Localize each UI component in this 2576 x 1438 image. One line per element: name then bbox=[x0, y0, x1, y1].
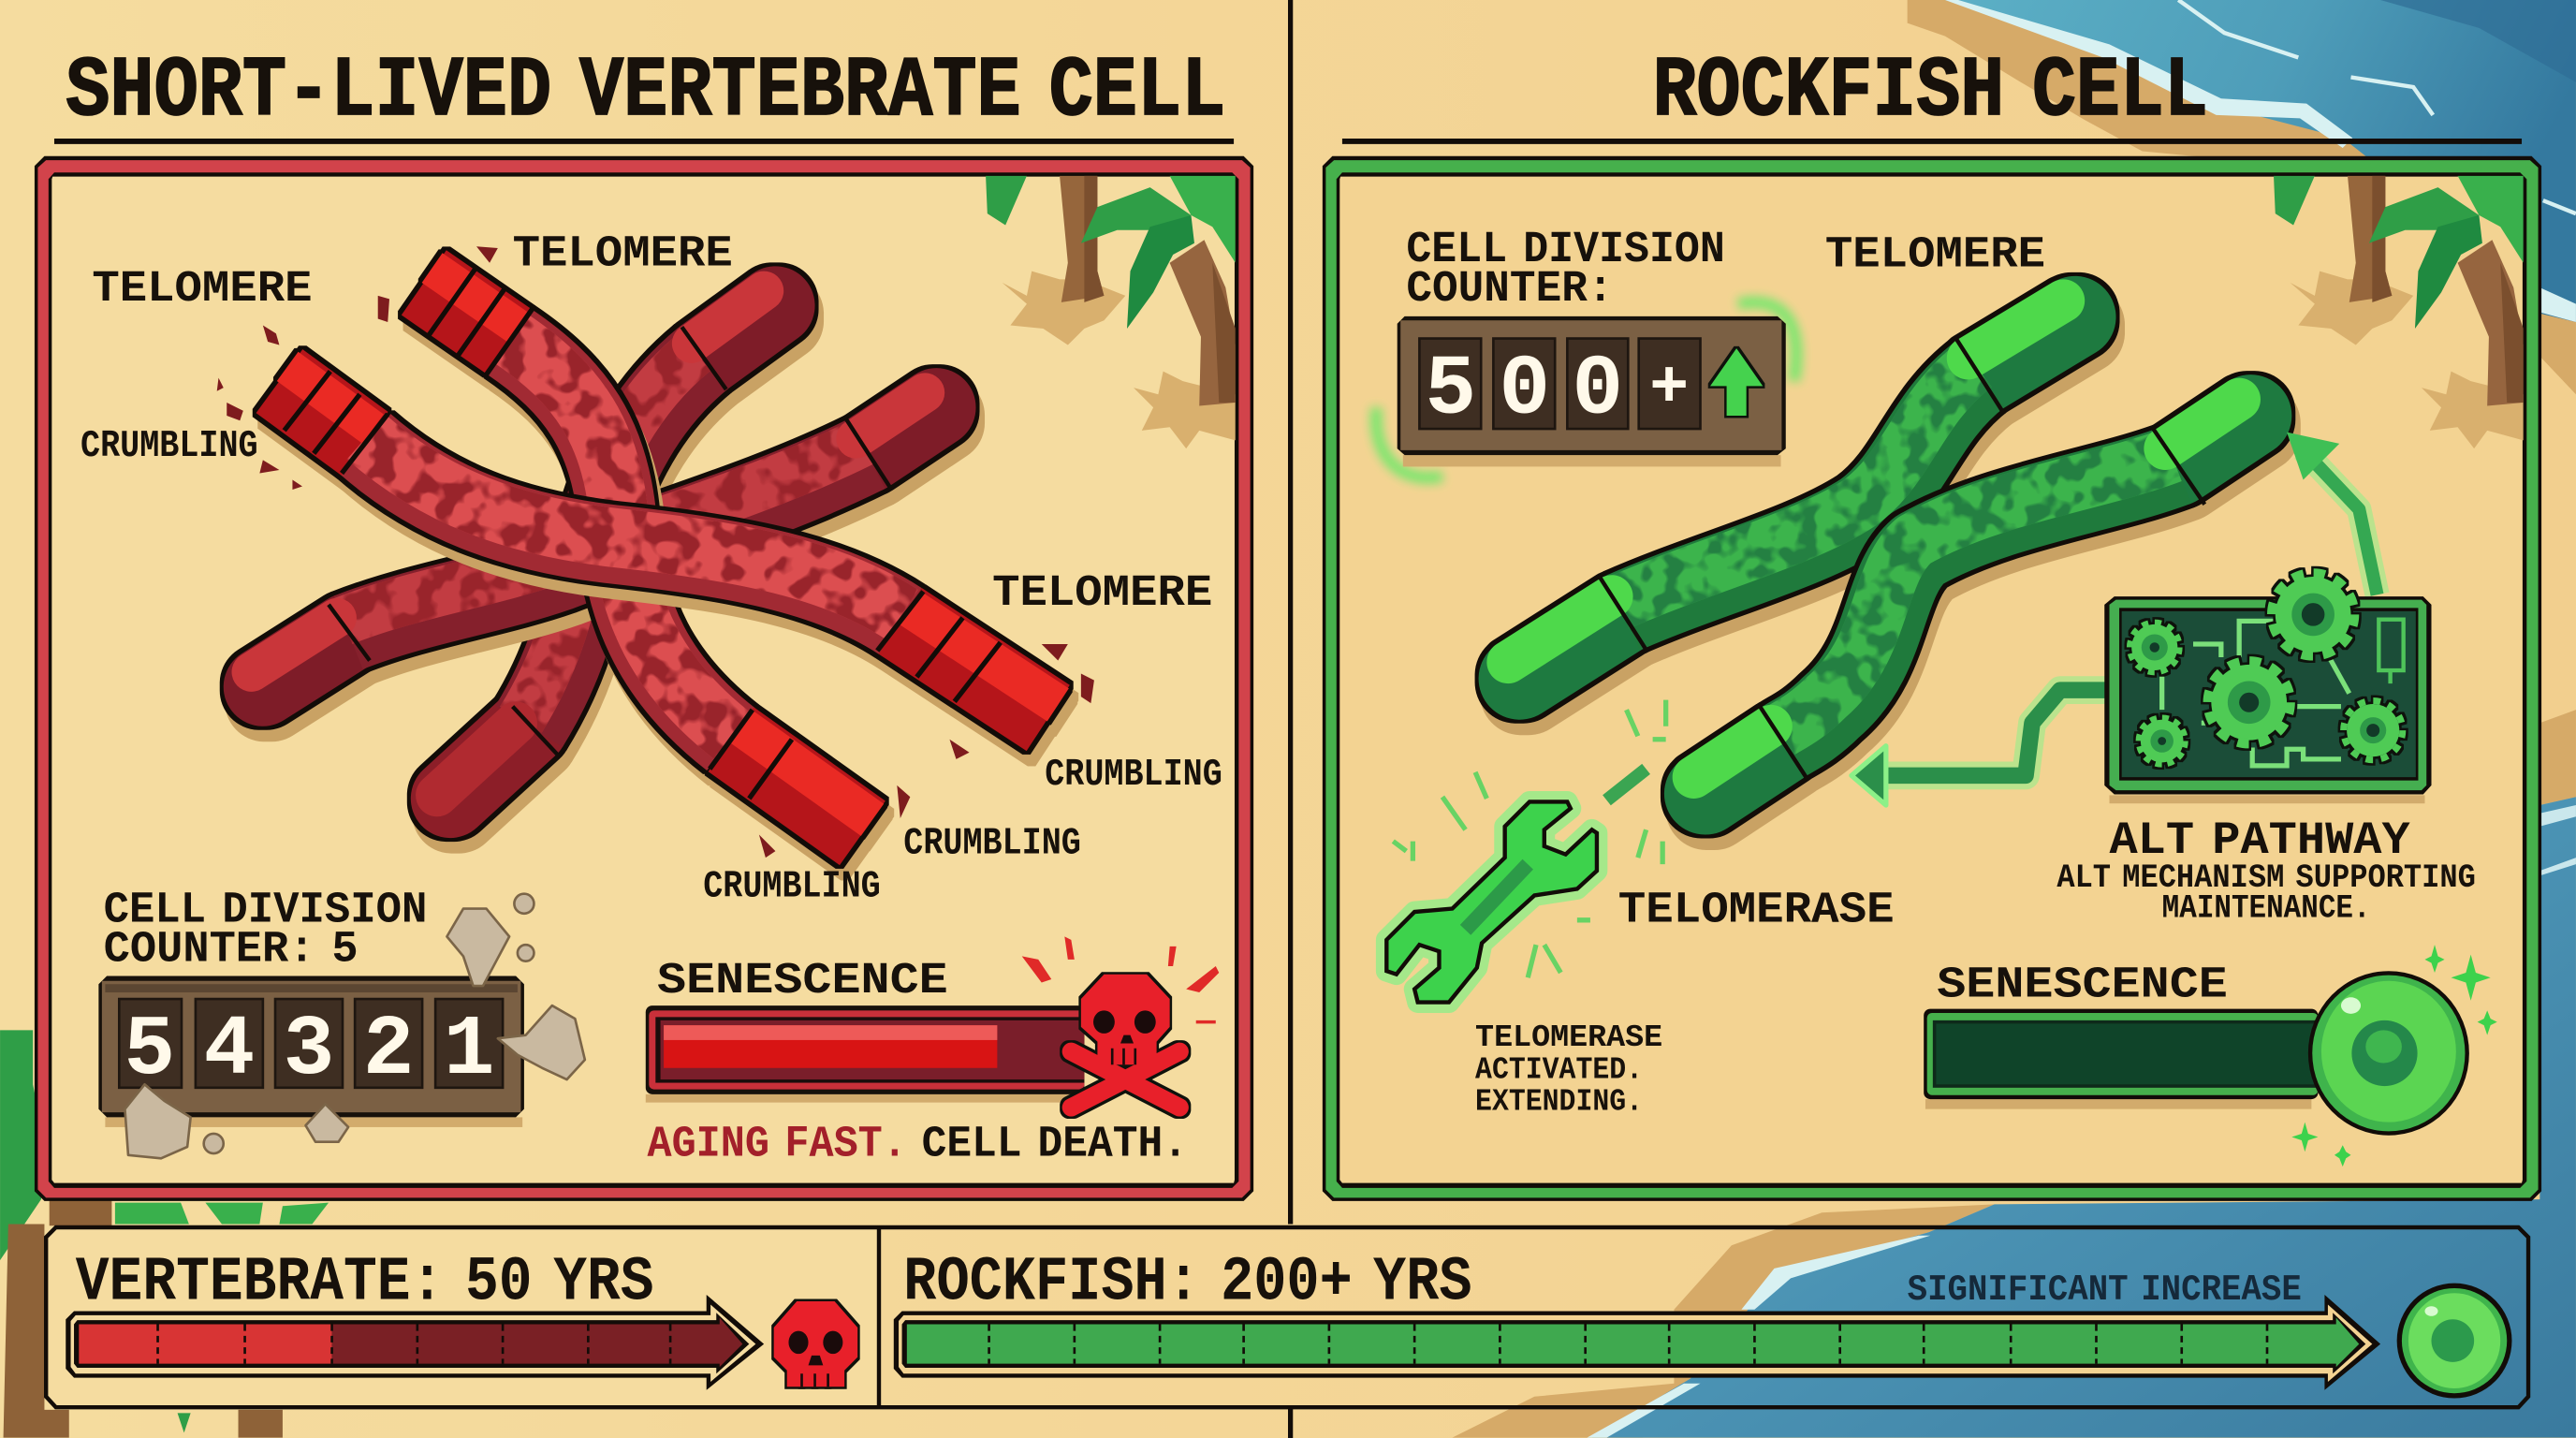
icon: healthy cell bbox=[2308, 971, 2469, 1136]
status text: aging fast, cell death: AGING FAST. bbox=[648, 1121, 907, 1170]
crumbling debris bbox=[217, 246, 1094, 858]
label: crumbling: CRUMBLING bbox=[903, 823, 1081, 866]
panel: rockfish cell bbox=[1323, 156, 2541, 1201]
label: crumbling: CRUMBLING bbox=[80, 425, 258, 468]
title: rockfish cell: ROCKFISH CELL bbox=[1653, 44, 2208, 140]
crumbling block separators bbox=[285, 270, 1001, 799]
panel: short-lived vertebrate cell: COUNTER: 5 bbox=[104, 926, 359, 976]
text: telomerase activated bbox=[1475, 1020, 1662, 1121]
icon: healthy cell small bbox=[2397, 1284, 2511, 1399]
separators on back arms bbox=[329, 327, 890, 756]
label: cell division counter: CELL DIVISION bbox=[1406, 226, 1725, 275]
panel: short-lived vertebrate cell bbox=[35, 156, 1253, 1201]
arm: back upper right to lower left bbox=[437, 291, 775, 799]
text: telomerase activated: ACTIVATED. bbox=[1475, 1052, 1643, 1088]
label: telomere: TELOMERE bbox=[513, 229, 733, 279]
panel: rockfish cell: COUNTER: bbox=[1406, 265, 1613, 315]
bar: senescence red bbox=[646, 1005, 1084, 1103]
arm: right to lower left bbox=[1693, 399, 2250, 794]
counter: 500+: + bbox=[1649, 352, 1689, 426]
alt pathway arrow: to chromosome bbox=[1852, 690, 2130, 805]
status text: aging fast, cell death: CELL DEATH. bbox=[922, 1121, 1188, 1170]
counter: 5 4 3 2 1: 2 bbox=[363, 1003, 415, 1099]
text: alt mechanism: MAINTENANCE. bbox=[2162, 889, 2371, 927]
gear bbox=[2344, 701, 2403, 760]
counter: 500+ bbox=[1398, 316, 1786, 466]
counter: 5 4 3 2 1: 3 bbox=[284, 1003, 334, 1099]
label: telomere: TELOMERE bbox=[992, 569, 1212, 619]
chromosome: red X bbox=[252, 268, 1058, 833]
label: telomerase: TELOMERASE bbox=[1618, 887, 1895, 936]
palm tree: background bottom left bbox=[0, 1030, 329, 1438]
arm: front upper left to lower right bbox=[424, 268, 872, 833]
text: telomerase activated: TELOMERASE bbox=[1475, 1020, 1662, 1056]
label: vertebrate 50 yrs: VERTEBRATE: 50 YRS bbox=[76, 1247, 654, 1318]
label: alt pathway: ALT PATHWAY bbox=[2110, 814, 2410, 867]
palm trees in panel bbox=[2274, 176, 2524, 448]
label: senescence: SENESCENCE bbox=[1937, 961, 2228, 1010]
sparkles bbox=[2291, 945, 2497, 1167]
smoke puffs bbox=[124, 894, 585, 1158]
label: cell division counter 5: CELL DIVISION bbox=[104, 887, 427, 936]
arrow bar: rockfish bbox=[894, 1295, 2380, 1390]
counter: 5 4 3 2 1: 5 bbox=[124, 1003, 175, 1099]
arrow bar: vertebrate bbox=[66, 1295, 764, 1390]
glow arcs around counter bbox=[1376, 302, 1796, 477]
icon: skull and crossbones bbox=[1071, 975, 1179, 1108]
icon: wrench telomerase bbox=[1386, 769, 1647, 1003]
title: short-lived vertebrate cell: SHORT-LIVED VERTEBRATE CELL bbox=[66, 44, 1225, 140]
status text: aging fast, cell death bbox=[648, 1121, 1188, 1170]
label: significant increase: SIGNIFICANT INCREASE bbox=[1908, 1269, 2302, 1311]
arm: back right to lower left bbox=[252, 392, 936, 687]
gear bbox=[2272, 574, 2354, 655]
label: telomere: TELOMERE bbox=[92, 265, 313, 315]
label: rockfish 200+ yrs: ROCKFISH: 200+ YRS bbox=[903, 1247, 1472, 1318]
icon: skull bbox=[774, 1301, 857, 1387]
label: crumbling: CRUMBLING bbox=[703, 865, 881, 908]
counter: 5 4 3 2 1 bbox=[98, 976, 524, 1127]
text: alt mechanism: ALT MECHANISM SUPPORTING bbox=[2056, 859, 2476, 897]
counter: 500+: 0 bbox=[1572, 343, 1623, 439]
timeline strip bbox=[46, 1227, 2528, 1407]
arm: front left to lower right bbox=[279, 366, 1058, 718]
icon: up arrow bbox=[1710, 348, 1763, 416]
gear bbox=[2130, 623, 2179, 672]
sparks around wrench bbox=[1393, 700, 1666, 977]
gear bbox=[2208, 661, 2291, 743]
counter: 500+: 0 bbox=[1499, 343, 1550, 439]
arm: upper right to lower left bbox=[1508, 301, 2075, 679]
vertical divider bbox=[1289, 0, 1292, 1438]
bar: senescence green bbox=[1924, 1009, 2318, 1109]
counter: 500+: 5 bbox=[1425, 343, 1476, 439]
segment separators bbox=[1599, 337, 2204, 779]
counter: 5 4 3 2 1: 4 bbox=[204, 1003, 255, 1099]
pathway panel with gears bbox=[2104, 574, 2431, 803]
gear bbox=[2139, 718, 2185, 764]
label: senescence: SENESCENCE bbox=[657, 957, 948, 1006]
chromosome: green X bbox=[1508, 301, 2250, 794]
label: crumbling: CRUMBLING bbox=[1045, 754, 1222, 797]
counter: 5 4 3 2 1: 1 bbox=[444, 1003, 495, 1099]
sparks around skull bbox=[1022, 936, 1219, 1023]
alt pathway arrow: to telomere bbox=[2287, 433, 2378, 594]
palm trees in panel bbox=[986, 176, 1236, 448]
text: alt mechanism bbox=[2056, 859, 2476, 927]
label: telomere: TELOMERE bbox=[1825, 230, 2045, 280]
text: telomerase activated: EXTENDING. bbox=[1475, 1085, 1643, 1121]
